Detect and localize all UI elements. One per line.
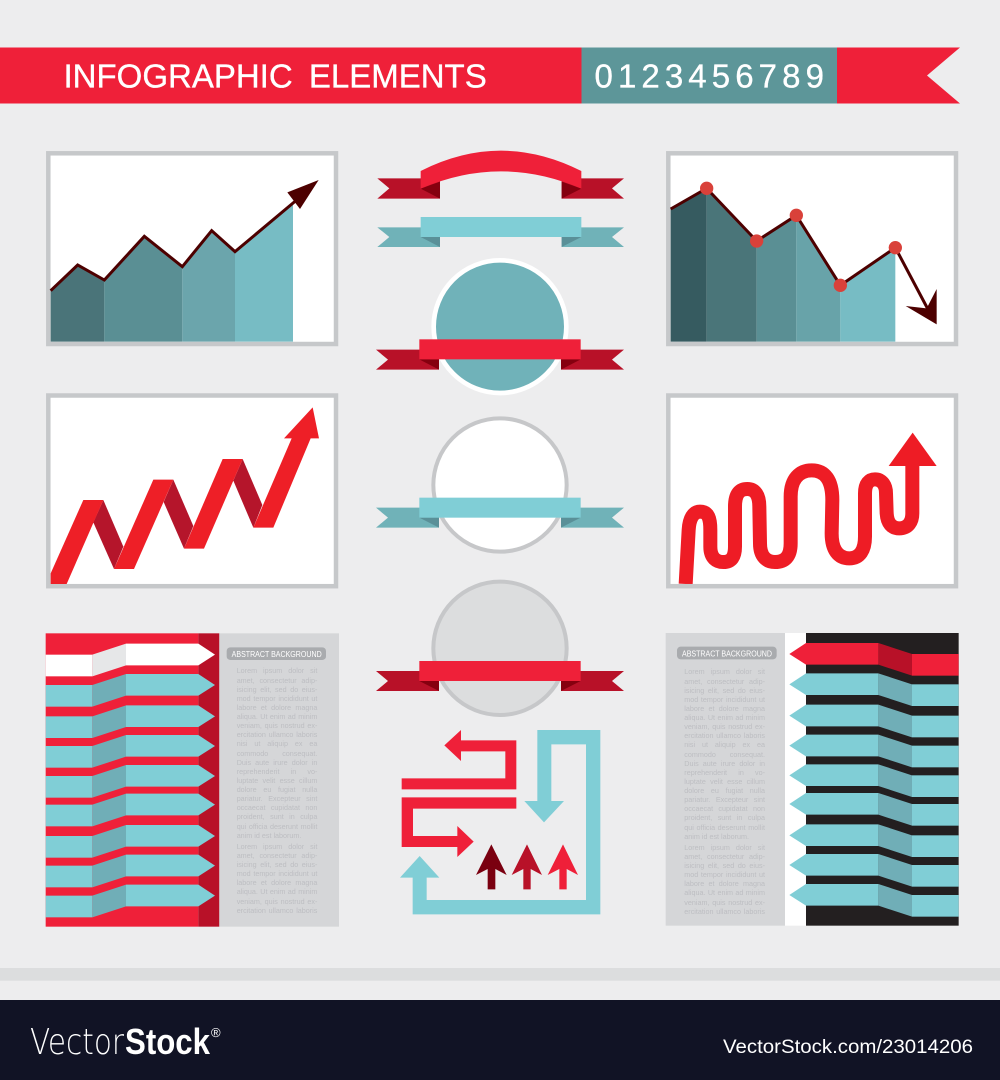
badge: grey circle with red ribbon — [376, 582, 624, 715]
row 6 — [789, 793, 959, 826]
row 2 — [46, 674, 215, 707]
row 5 — [46, 765, 215, 798]
text block: left panel lorem 1: isicing elit, sed do eius- — [237, 685, 317, 694]
text block: left panel lorem 1: luptate velit esse cillum — [237, 776, 317, 785]
panel: falling area chart — [668, 153, 956, 344]
red flag ribbon — [0, 48, 960, 104]
text block: left panel lorem 1: pariatur. Excepteur sint — [237, 794, 317, 803]
row 6 — [46, 794, 215, 826]
text block: right panel lorem 2: mod tempor incididunt ut — [684, 870, 765, 879]
text block: right panel lorem 2: ercitation ullamco laboris — [684, 907, 765, 916]
text block: right panel lorem 1: mod tempor incididunt ut — [684, 695, 765, 704]
text block: right panel lorem 2: amet, consectetur adip- — [684, 852, 765, 861]
text block: right panel lorem 2: aliqua. Ut enim ad minim — [684, 888, 765, 897]
footer bar — [0, 1000, 1000, 1080]
text block: right panel lorem 1: commodo consequat. — [684, 750, 765, 759]
row 8 — [46, 855, 215, 887]
row 5 — [789, 764, 959, 797]
text block: left panel lorem 1: aliqua. Ut enim ad minim — [237, 712, 317, 721]
digits: 0123456789 — [594, 57, 829, 94]
arrow: red pointing left — [402, 730, 516, 789]
text block: left panel lorem 1: proident, sunt in culpa — [237, 812, 317, 821]
text block: right panel lorem 2: isicing elit, sed do eius- — [684, 861, 765, 870]
arrow: small dark up — [476, 844, 507, 889]
row 4 — [46, 735, 215, 768]
text block: right panel lorem 1: aliqua. Ut enim ad minim — [684, 713, 765, 722]
text block: left panel lorem 1: Lorem ipsum dolor sit — [237, 666, 317, 675]
text block: right panel lorem 1: Duis aute irure dolor in — [684, 759, 765, 768]
row 9 — [789, 884, 959, 917]
text block: left panel lorem 1 — [237, 666, 318, 840]
text block: right panel lorem 1: luptate velit esse cillum — [684, 777, 765, 786]
text block: right panel lorem 1: Lorem ipsum dolor sit — [684, 667, 765, 676]
title: INFOGRAPHIC ELEMENTS — [64, 57, 487, 94]
text block: left panel lorem 1: nisi ut aliquip ex ea — [237, 739, 317, 748]
text block: right panel lorem 2 — [684, 843, 765, 916]
text block: left panel lorem 1: dolore eu fugiat nulla — [237, 785, 317, 794]
pill heading — [677, 647, 777, 659]
text block: left panel lorem 2: veniam, quis nostrud ex- — [237, 897, 317, 906]
row 7 — [46, 825, 215, 858]
arrow: teal pointing down — [400, 730, 600, 914]
arrow: small bright up — [548, 844, 578, 889]
arrow: red pointing right — [402, 797, 516, 857]
row 2 — [789, 673, 959, 706]
text block: left panel lorem 1: veniam, quis nostrud ex- — [237, 721, 317, 730]
text block: left panel lorem 1: Duis aute irure dolor in — [237, 758, 317, 767]
row 3 — [789, 705, 959, 737]
row 3 — [46, 705, 215, 738]
text block: left panel lorem 2: ercitation ullamco laboris — [237, 906, 317, 915]
text block: left panel lorem 1: mod tempor incididunt ut — [237, 694, 317, 703]
text block: left panel lorem 2: labore et dolore magna — [237, 878, 317, 887]
text block: right panel lorem 1: dolore eu fugiat nulla — [684, 786, 765, 795]
text block: left panel lorem 2 — [237, 842, 318, 915]
text block: left panel lorem 1: labore et dolore magna — [237, 703, 317, 712]
text block: left panel lorem 2: amet, consectetur adip- — [237, 851, 317, 860]
text block: left panel lorem 1: commodo consequat. — [237, 749, 317, 758]
footer logo: Stock — [125, 1021, 211, 1062]
text block: right panel lorem 1: veniam, quis nostrud ex- — [684, 722, 765, 731]
row 8 — [789, 854, 959, 887]
pill heading: ABSTRACT BACKGROUND — [232, 650, 322, 659]
text block: left panel lorem 1: reprehenderit in vo- — [237, 767, 317, 776]
badge: white circle with teal ribbon — [376, 418, 624, 552]
text block: right panel lorem 1: anim id est laborum. — [684, 832, 749, 841]
teal number box — [582, 48, 837, 104]
row 9 — [46, 885, 215, 917]
text block: right panel lorem 1: occaecat cupidatat non — [684, 804, 765, 813]
panel: zigzag ribbon arrow — [48, 396, 336, 586]
panel: right stacked list — [666, 633, 959, 926]
footer logo — [30, 1021, 221, 1063]
header banner — [0, 48, 960, 104]
text block: right panel lorem 2: Lorem ipsum dolor sit — [684, 843, 765, 852]
badge: teal circle with red ribbon — [376, 260, 624, 393]
footer image id: VectorStock.com/23014206 — [723, 1036, 973, 1058]
arrows group — [400, 730, 600, 914]
footer logo: Vector — [30, 1022, 124, 1063]
text block: right panel lorem 1: pariatur. Excepteur sint — [684, 795, 765, 804]
pill heading: ABSTRACT BACKGROUND — [682, 649, 772, 658]
text block: left panel lorem 2: mod tempor incididunt ut — [237, 869, 317, 878]
text block: right panel lorem 2: labore et dolore magna — [684, 879, 765, 888]
text block: left panel lorem 2: isicing elit, sed do eius- — [237, 860, 317, 869]
panel: left stacked list — [46, 633, 339, 927]
row 7 — [789, 824, 959, 857]
text block: left panel lorem 1: amet, consectetur adip- — [237, 676, 317, 685]
text block: left panel lorem 2: Lorem ipsum dolor sit — [237, 842, 317, 851]
text block: left panel lorem 1: occaecat cupidatat non — [237, 803, 317, 812]
ribbon: curved red — [377, 151, 624, 199]
arrow: small medium up — [512, 844, 542, 889]
text block: right panel lorem 1: isicing elit, sed do eius- — [684, 686, 765, 695]
text block: right panel lorem 1: nisi ut aliquip ex ea — [684, 740, 765, 749]
panel: wavy arrow — [668, 396, 956, 586]
text block: left panel lorem 1: anim id est laborum. — [237, 831, 301, 840]
text block: left panel lorem 1: qui officia deserunt mollit — [237, 822, 317, 831]
panel: rising area chart — [48, 153, 336, 344]
row 4 — [789, 735, 959, 767]
text block: right panel lorem 1 — [684, 667, 765, 841]
text block: right panel lorem 1: ercitation ullamco laboris — [684, 731, 765, 740]
text block: right panel lorem 1: proident, sunt in culpa — [684, 813, 765, 822]
text block: right panel lorem 1: labore et dolore magna — [684, 704, 765, 713]
footer logo: ® — [211, 1025, 221, 1040]
text block: right panel lorem 1: amet, consectetur adip- — [684, 677, 765, 686]
bottom grey strip — [0, 968, 1000, 981]
text block: left panel lorem 1: ercitation ullamco laboris — [237, 730, 317, 739]
text block: right panel lorem 2: veniam, quis nostrud ex- — [684, 898, 765, 907]
ribbon: straight teal — [377, 217, 624, 247]
text block: left panel lorem 2: aliqua. Ut enim ad minim — [237, 887, 317, 896]
text block: right panel lorem 1: qui officia deserunt mollit — [684, 823, 765, 832]
row: white highlight — [46, 644, 215, 676]
text block: right panel lorem 1: reprehenderit in vo- — [684, 768, 765, 777]
pill heading — [227, 647, 326, 660]
row: red highlight — [789, 643, 959, 676]
